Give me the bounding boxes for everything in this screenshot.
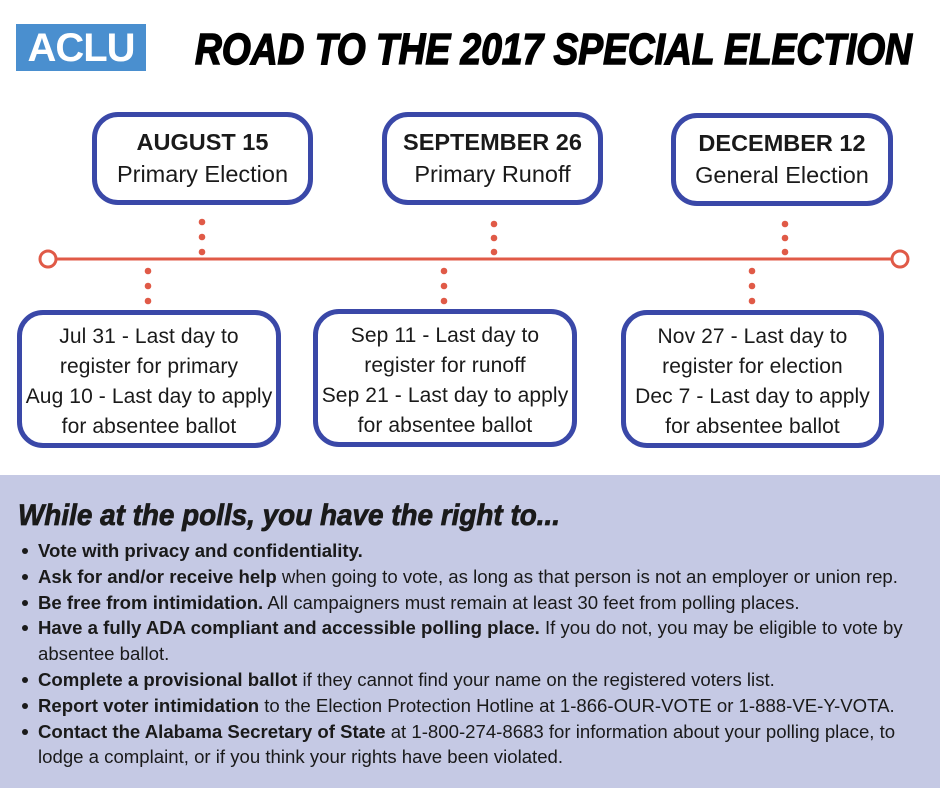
rights list: Report voter intimidation to the Election Protection Hotline at 1-866-OUR-VOTE or 1-888-VE-Y-VOTA.: [38, 695, 895, 716]
rights list: lodge a complaint, or if you think your rights have been violated.: [38, 746, 563, 767]
box: August 15: AUGUST 15: [137, 129, 268, 155]
logo: ACLU: ACLU: [27, 26, 135, 70]
box: general deadlines: register for election: [662, 355, 843, 378]
box: runoff deadlines: [313, 309, 577, 447]
box: August 15: [92, 112, 313, 205]
box: primary deadlines: for absentee ballot: [62, 415, 236, 438]
box: general deadlines: Dec 7 - Last day to apply: [635, 385, 870, 408]
box: primary deadlines: Aug 10 - Last day to apply: [26, 385, 272, 408]
rights list: Be free from intimidation. All campaigners must remain at least 30 feet from polling places.: [38, 592, 800, 613]
box: December 12: [671, 113, 893, 206]
timeline: [38, 218, 910, 304]
box: runoff deadlines: register for runoff: [364, 354, 526, 377]
rights list: Vote with privacy and confidentiality.: [38, 540, 363, 561]
box: runoff deadlines: Sep 11 - Last day to: [351, 324, 539, 347]
box: September 26: Primary Runoff: [414, 161, 571, 187]
rights list: Ask for and/or receive help when going to vote, as long as that person is not an employer or union rep.: [38, 566, 898, 587]
box: primary deadlines: [17, 310, 281, 448]
box: December 12: DECEMBER 12: [698, 130, 866, 156]
box: primary deadlines: register for primary: [60, 355, 238, 378]
rights list: Have a fully ADA compliant and accessible polling place. If you do not, you may be eligible to vote by: [38, 617, 903, 638]
box: primary deadlines: Jul 31 - Last day to: [59, 325, 239, 348]
box: general deadlines: for absentee ballot: [665, 415, 840, 438]
box: general deadlines: [621, 310, 884, 448]
box: September 26: [382, 112, 603, 205]
box: general deadlines: Nov 27 - Last day to: [658, 325, 847, 348]
box: runoff deadlines: for absentee ballot: [358, 414, 532, 437]
box: September 26: SEPTEMBER 26: [403, 129, 582, 155]
box: runoff deadlines: Sep 21 - Last day to apply: [322, 384, 568, 407]
rights list: absentee ballot.: [38, 643, 169, 664]
rights list: Complete a provisional ballot if they cannot find your name on the registered voters list.: [38, 669, 775, 690]
box: August 15: Primary Election: [117, 161, 288, 187]
box: December 12: General Election: [695, 162, 869, 188]
rights list: Contact the Alabama Secretary of State at 1-800-274-8683 for information about your polling place, to: [38, 721, 895, 742]
panel: rights: [0, 475, 940, 788]
rights list: [22, 540, 903, 767]
